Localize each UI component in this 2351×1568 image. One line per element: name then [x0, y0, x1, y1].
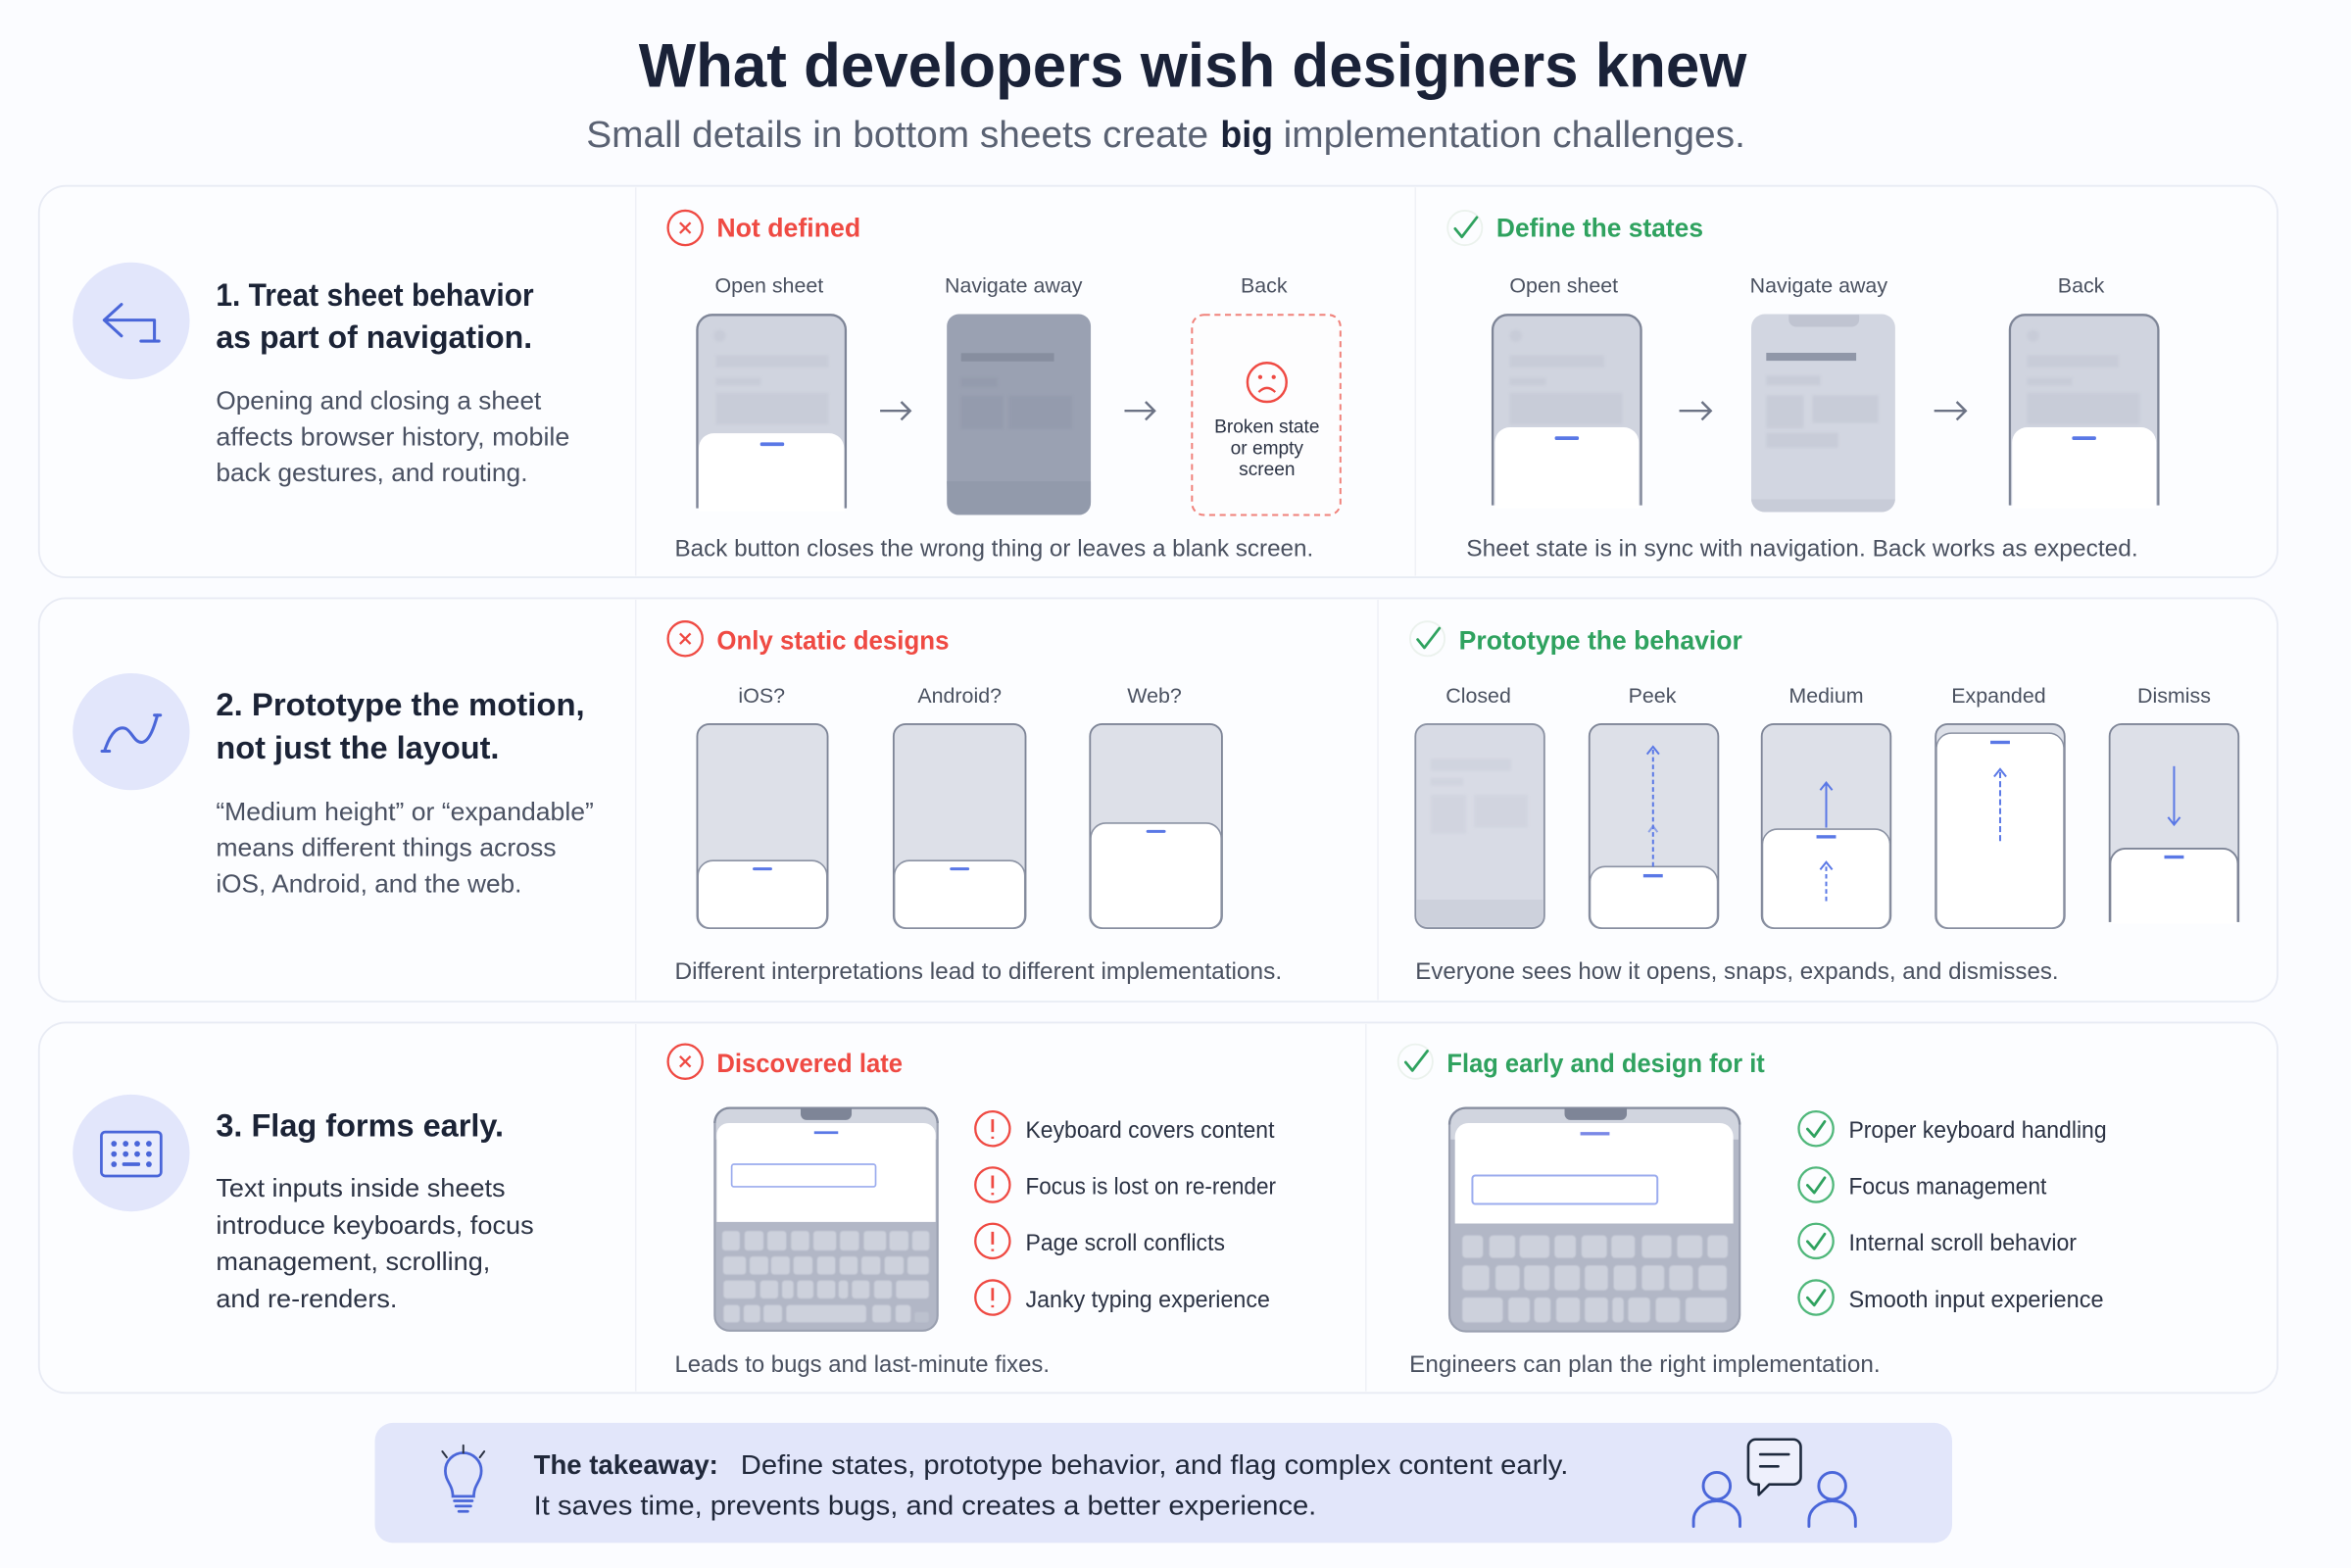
text: motion description — [216, 797, 594, 898]
phone: designed keyboard handling — [1449, 1108, 1739, 1332]
item: focus is lost: Focus is lost on re-render — [1026, 1175, 1276, 1200]
panel: sheet behavior as navigation — [39, 186, 2278, 577]
icon: people talking — [1693, 1440, 1855, 1526]
list: solutions — [1799, 1111, 2107, 1315]
text: forms description: management, scrolling, — [216, 1247, 490, 1276]
caption: only static designs: Different interpretations lead to different implementations. — [674, 958, 1282, 985]
state labels: Dismiss — [2137, 684, 2211, 708]
text: takeaway: It saves time, prevents bugs, and creates a better experience. — [534, 1490, 1316, 1520]
panel: prototype the motion — [39, 598, 2278, 1002]
platform labels: Android? — [917, 684, 1002, 708]
phone: open sheet in sync — [1493, 315, 1641, 509]
arrow — [1680, 402, 1711, 419]
phone: dismiss — [2110, 724, 2238, 923]
state labels: Medium — [1788, 684, 1864, 708]
status: discovered late — [668, 1045, 903, 1079]
phone: medium — [1762, 724, 1890, 928]
heading: prototype the motion — [216, 687, 585, 765]
step labels: define the states: Back — [2058, 273, 2105, 297]
text: motion description: iOS, Android, and the web. — [216, 868, 521, 898]
icon: keyboard — [73, 1095, 190, 1211]
phone: Android — [894, 724, 1026, 928]
status: only static designs — [668, 621, 949, 656]
text: navigation description: Opening and closing a sheet — [216, 386, 542, 416]
heading: treat sheet behavior — [216, 277, 534, 355]
state labels: Closed — [1445, 684, 1511, 708]
text: forms description: and re-renders. — [216, 1284, 397, 1313]
item: janky typing: Janky typing experience — [1026, 1288, 1270, 1313]
phone: closed — [1415, 724, 1544, 928]
icon: motion curve — [73, 673, 190, 790]
item: smooth input experience — [1799, 1280, 2104, 1315]
state labels: Peek — [1629, 684, 1677, 708]
icon: light bulb — [442, 1446, 484, 1511]
text: forms description: introduce keyboards, focus — [216, 1210, 534, 1240]
phone: peek — [1590, 724, 1718, 928]
text: navigation description: back gestures, and routing. — [216, 458, 528, 487]
text: takeaway: The takeaway: — [534, 1449, 718, 1480]
platform labels — [738, 684, 1182, 708]
caption: not defined: Back button closes the wrong thing or leaves a blank screen. — [674, 536, 1313, 563]
platform labels: iOS? — [738, 684, 785, 708]
item: page scroll conflicts — [975, 1224, 1225, 1258]
state labels — [1445, 684, 2211, 708]
status: define the states: Define the states — [1496, 214, 1703, 243]
step labels: not defined: Navigate away — [945, 273, 1083, 297]
item: keyboard covers content — [975, 1111, 1275, 1146]
phone: expanded — [1935, 724, 2065, 928]
status: only static designs: Only static designs — [716, 625, 949, 655]
heading: treat sheet behavior: 1. Treat sheet behavior — [216, 277, 534, 313]
title: What developers wish designers knew — [639, 32, 1747, 101]
text: takeaway — [534, 1449, 1568, 1520]
text: forms description: Text inputs inside sheets — [216, 1173, 506, 1202]
caption: define the states: Sheet state is in sync with navigation. Back works as expected. — [1466, 536, 2138, 563]
broken state card: or empty — [1231, 439, 1303, 460]
text: forms description — [216, 1173, 534, 1313]
heading: treat sheet behavior: as part of navigation. — [216, 319, 532, 355]
item: page scroll conflicts: Page scroll conflicts — [1026, 1231, 1225, 1256]
broken state card — [1192, 315, 1341, 515]
item: focus is lost — [975, 1167, 1276, 1202]
status: discovered late: Discovered late — [716, 1049, 903, 1078]
phone: next page — [1751, 315, 1895, 512]
icon: back navigation arrow — [73, 263, 190, 379]
item: janky typing — [975, 1280, 1270, 1315]
text: motion description: “Medium height” or “expandable” — [216, 797, 594, 826]
step labels: not defined: Back — [1241, 273, 1288, 297]
item: proper keyboard handling: Proper keyboard handling — [1848, 1118, 2107, 1144]
arrow — [1935, 402, 1966, 419]
phone: open sheet — [697, 315, 846, 512]
arrow — [1124, 402, 1154, 419]
phone: keyboard covers content — [714, 1108, 938, 1331]
panel: flag forms early — [39, 1022, 2278, 1393]
callout: takeaway banner — [375, 1423, 1952, 1543]
heading: prototype the motion: not just the layout. — [216, 730, 499, 765]
status: prototype the behavior: Prototype the behavior — [1459, 625, 1742, 655]
arrow — [880, 402, 910, 419]
item: internal scroll behavior: Internal scroll behavior — [1848, 1231, 2077, 1256]
item: smooth input experience: Smooth input experience — [1848, 1288, 2104, 1313]
text: takeaway: Define states, prototype behavior, and flag complex content early. — [741, 1449, 1568, 1480]
item: internal scroll behavior — [1799, 1224, 2077, 1258]
phone: back to sheet — [2010, 315, 2158, 509]
item: focus management — [1799, 1167, 2047, 1202]
broken state card: Broken state — [1214, 416, 1319, 437]
list: problems — [975, 1111, 1276, 1315]
phone: Web — [1090, 724, 1222, 928]
text: navigation description — [216, 386, 569, 487]
heading: flag forms early: 3. Flag forms early. — [216, 1108, 504, 1144]
text: motion description: means different things across — [216, 833, 557, 862]
item: keyboard covers content: Keyboard covers content — [1026, 1118, 1275, 1144]
broken state card: screen — [1239, 460, 1296, 480]
step labels: define the states: Open sheet — [1509, 273, 1618, 297]
status: not defined: Not defined — [716, 214, 860, 243]
caption: discovered late: Leads to bugs and last-minute fixes. — [674, 1351, 1050, 1378]
phone: iOS — [697, 724, 828, 928]
subtitle: big — [1220, 114, 1273, 156]
item: proper keyboard handling — [1799, 1111, 2107, 1146]
status: define the states — [1447, 211, 1703, 245]
text: navigation description: affects browser history, mobile — [216, 421, 569, 451]
status: not defined — [668, 211, 860, 245]
phone: navigate away broken — [947, 315, 1091, 515]
state labels: Expanded — [1951, 684, 2046, 708]
heading: prototype the motion: 2. Prototype the motion, — [216, 687, 585, 722]
subtitle: implementation challenges. — [1284, 114, 1745, 156]
step labels: define the states — [1509, 273, 2105, 297]
item: focus management: Focus management — [1848, 1175, 2047, 1200]
platform labels: Web? — [1127, 684, 1182, 708]
step labels: not defined — [715, 273, 1288, 297]
step labels: define the states: Navigate away — [1750, 273, 1887, 297]
subtitle — [586, 114, 1745, 156]
status: flag early: Flag early and design for it — [1446, 1049, 1765, 1078]
subtitle: Small details in bottom sheets create — [586, 114, 1208, 156]
step labels: not defined: Open sheet — [715, 273, 823, 297]
caption: prototype the behavior: Everyone sees how it opens, snaps, expands, and dismisses. — [1415, 958, 2059, 985]
caption: flag early: Engineers can plan the right implementation. — [1409, 1351, 1881, 1378]
